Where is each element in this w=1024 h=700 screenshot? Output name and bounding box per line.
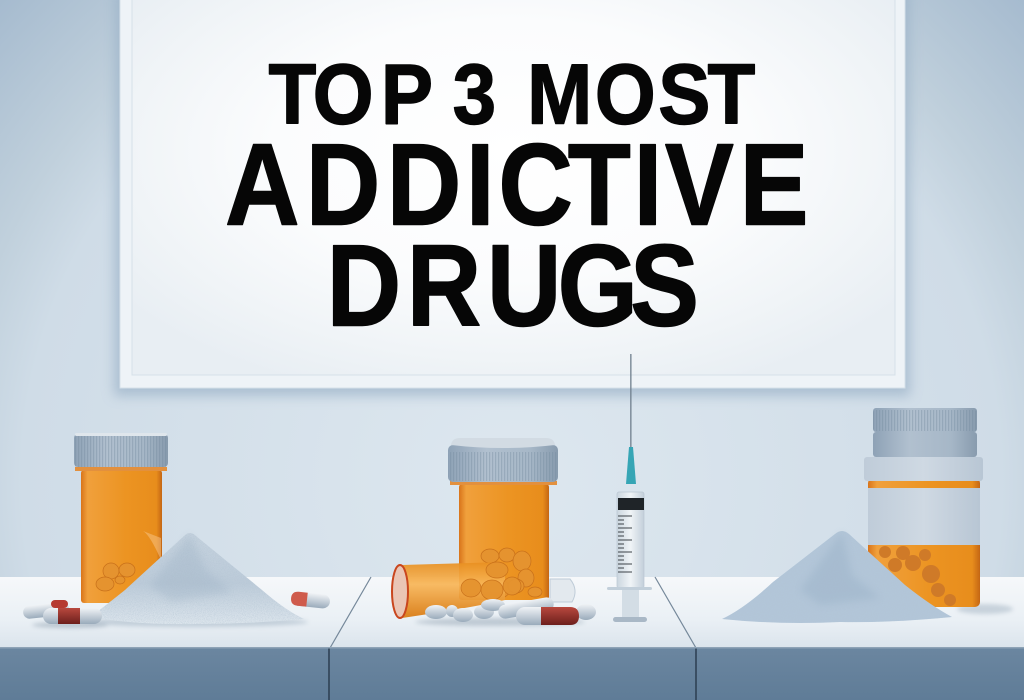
left bottle [74,433,168,603]
centre pills [415,579,596,626]
title: TOP 3 MOST [268,48,755,142]
left capsules [22,591,331,628]
title: ADDICTIVE [225,121,808,250]
title: DRUGS [327,222,699,351]
title [225,48,808,351]
right powder pile [722,531,952,623]
syringe scale [618,516,632,572]
tablets in left bottle [96,563,135,591]
centre bottle cap [448,438,558,482]
right bottle [864,408,1013,614]
panel: title board [114,0,910,396]
orange tablets right [879,546,956,606]
centre tipped bottle [392,562,521,618]
syringe [607,354,652,622]
counters [0,577,1024,700]
orange tablets [481,548,542,598]
left bottle cap [74,433,168,467]
centre upright bottle [448,438,558,600]
left powder pile [84,533,308,627]
right bottle caps [864,408,983,481]
